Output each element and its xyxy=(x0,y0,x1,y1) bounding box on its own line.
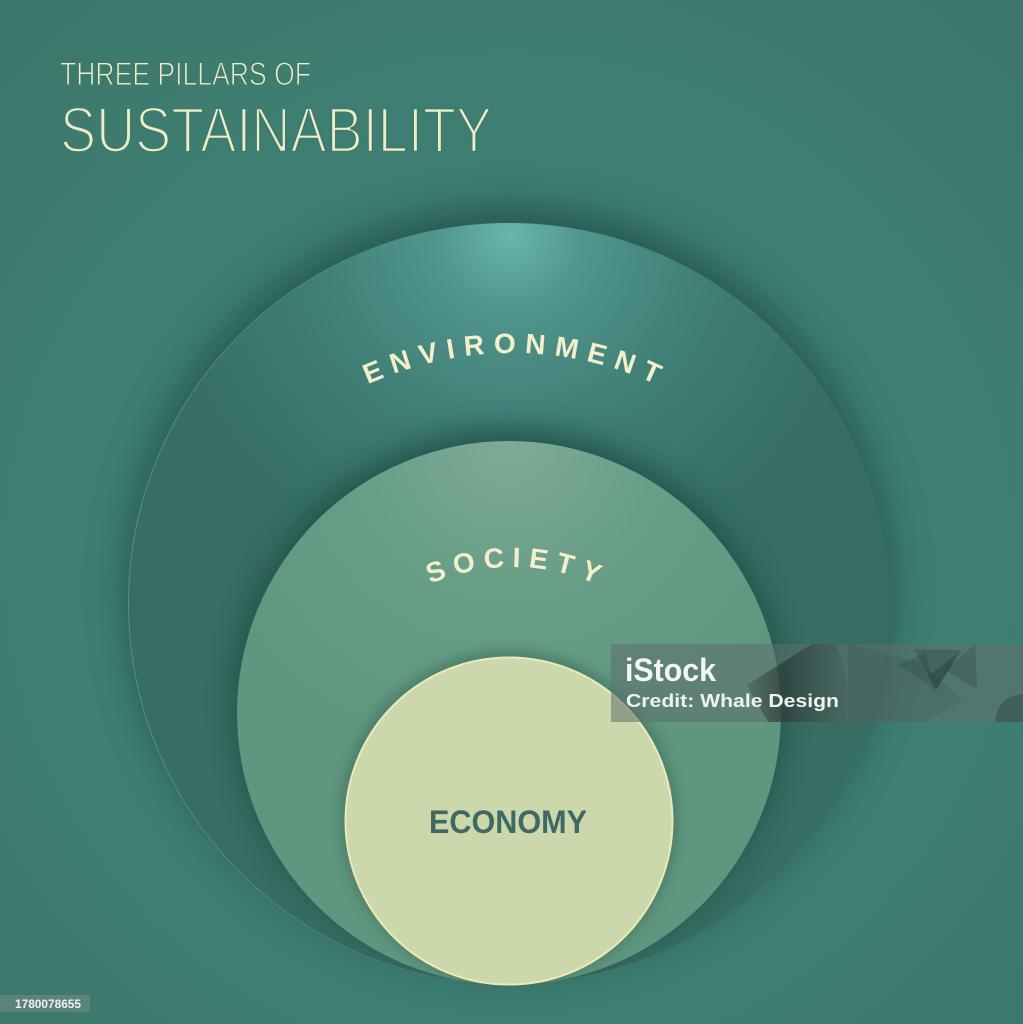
id tag number: 1780078655 xyxy=(15,997,81,1011)
id tag background xyxy=(0,995,90,1012)
watermark shapes xyxy=(747,644,1023,722)
economy circle xyxy=(346,658,672,984)
watermark band xyxy=(611,644,1023,722)
panel: economy circle xyxy=(341,650,677,986)
society circle xyxy=(237,441,781,985)
watermark: istock credit xyxy=(611,644,1023,722)
inner circle shadow xyxy=(341,650,677,986)
panel: society circle xyxy=(226,416,792,984)
watermark credit: Credit: Whale Design xyxy=(626,691,839,711)
middle circle shadow xyxy=(233,427,785,979)
title line: sustainability: SUSTAINABILITY xyxy=(60,94,492,166)
title xyxy=(60,56,492,166)
outer circle shadow xyxy=(126,206,892,972)
environment circle xyxy=(128,223,890,984)
environment label: ENVIRONMENT xyxy=(362,334,664,384)
society label: SOCIETY xyxy=(426,548,604,582)
watermark brand: iStock xyxy=(625,652,716,688)
economy label: ECONOMY xyxy=(429,804,587,840)
title line: three pillars of: THREE PILLARS OF xyxy=(60,56,311,92)
image id tag xyxy=(0,995,90,1012)
